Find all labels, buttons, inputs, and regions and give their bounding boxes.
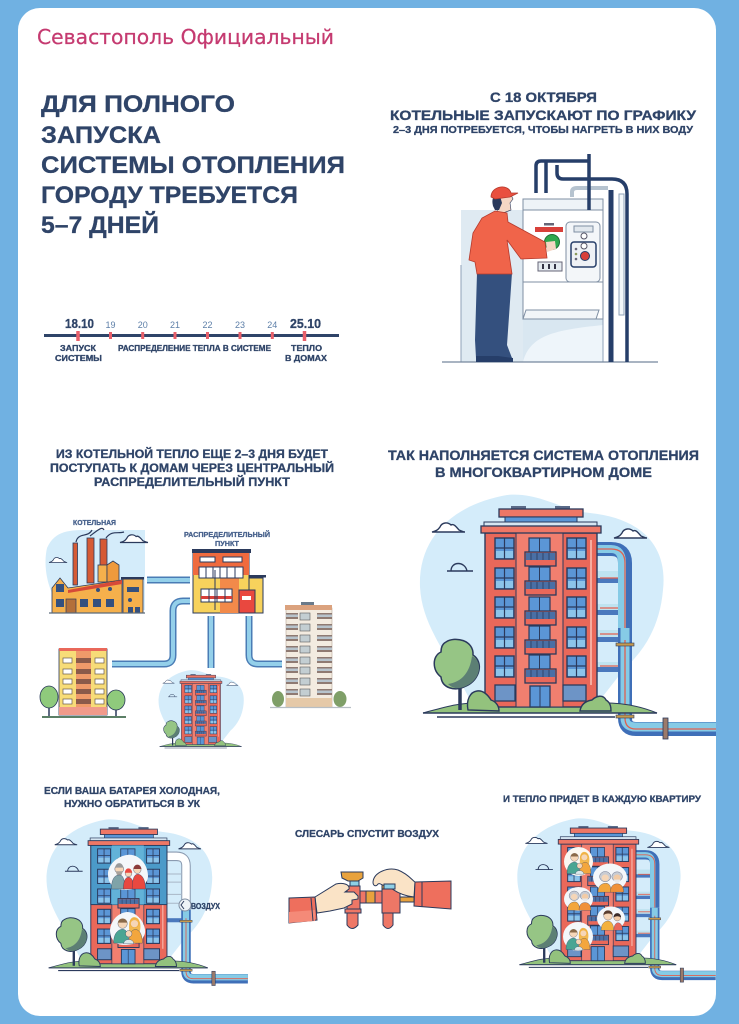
icon: yellow apartment block <box>40 648 126 717</box>
timeline dates: 23 <box>235 320 245 330</box>
timeline dates <box>65 317 321 331</box>
illustration: building filled with heat <box>420 495 716 739</box>
timeline captions: ЗАПУСК <box>60 343 97 353</box>
illustration: worker at boiler <box>442 154 658 362</box>
timeline dates: 19 <box>105 320 116 330</box>
bubble: cold family <box>108 855 148 890</box>
cold radiator heading <box>44 785 220 810</box>
main title: ЗАПУСКА <box>41 122 161 149</box>
label: distribution point: ПУНКТ <box>215 539 239 548</box>
main title: СИСТЕМЫ ОТОПЛЕНИЯ <box>41 152 345 179</box>
boiler heading: С 18 ОКТЯБРЯ <box>490 90 597 105</box>
icon: boiler house <box>46 528 148 613</box>
timeline <box>44 317 339 363</box>
main title: ГОРОДУ ТРЕБУЕТСЯ <box>41 182 298 209</box>
icon: tall apartment block <box>270 602 351 708</box>
boiler heading: КОТЕЛЬНЫЕ ЗАПУСКАЮТ ПО ГРАФИКУ <box>390 108 697 123</box>
illustration: building with warm apartments <box>517 818 716 982</box>
bubble: warm family <box>110 912 145 945</box>
worker <box>469 187 556 362</box>
main title: ДЛЯ ПОЛНОГО <box>41 91 235 118</box>
main title: 5–7 ДНЕЙ <box>41 211 159 239</box>
bubble: family <box>563 922 593 951</box>
icon: distribution point <box>192 549 266 613</box>
icon: red apartment block <box>159 670 244 748</box>
icon: air vent <box>179 899 191 911</box>
label: air: ВОЗДУХ <box>191 902 221 911</box>
timeline dates: 24 <box>267 320 277 330</box>
timeline dates: 21 <box>170 320 180 330</box>
timeline captions: СИСТЕМЫ <box>55 353 102 363</box>
timeline dates: 25.10 <box>290 317 321 331</box>
building heading: В МНОГОКВАРТИРНОМ ДОМЕ <box>435 465 652 480</box>
warm apartments heading: И ТЕПЛО ПРИДЕТ В КАЖДУЮ КВАРТИРУ <box>503 794 701 805</box>
boiler heading <box>390 90 697 136</box>
bubble: family <box>564 847 593 876</box>
timeline dates: 22 <box>202 320 213 330</box>
illustration: hands opening valve <box>289 869 451 928</box>
timeline captions: РАСПРЕДЕЛЕНИЕ ТЕПЛА В СИСТЕМЕ <box>118 343 271 353</box>
label: distribution point: РАСПРЕДЕЛИТЕЛЬНЫЙ <box>184 530 270 539</box>
boiler heading: 2–3 ДНЯ ПОТРЕБУЕТСЯ, ЧТОБЫ НАГРЕТЬ В НИХ ВОДУ <box>393 125 694 136</box>
brand heading: Севастополь Официальный <box>37 25 334 49</box>
distribution heading <box>50 446 334 489</box>
label: boiler house: КОТЕЛЬНАЯ <box>73 518 116 527</box>
main title <box>41 91 345 239</box>
timeline dates: 18.10 <box>65 317 94 331</box>
cold radiator heading: ЕСЛИ ВАША БАТАРЕЯ ХОЛОДНАЯ, <box>44 785 220 797</box>
distribution diagram <box>40 518 351 748</box>
plumber heading: СЛЕСАРЬ СПУСТИТ ВОЗДУХ <box>295 828 439 840</box>
bubble: elderly couple <box>593 864 627 892</box>
boiler cabinet <box>523 199 603 319</box>
heating pipes <box>536 154 627 362</box>
building heading <box>388 448 699 480</box>
distribution heading: РАСПРЕДЕЛИТЕЛЬНЫЙ ПУНКТ <box>94 474 291 489</box>
bubble: young couple <box>597 906 625 930</box>
right hand <box>373 869 451 909</box>
label: distribution point <box>184 530 270 548</box>
timeline captions <box>55 343 327 363</box>
distribution heading: ПОСТУПАТЬ К ДОМАМ ЧЕРЕЗ ЦЕНТРАЛЬНЫЙ <box>50 460 334 475</box>
bubble: elderly couple <box>564 887 593 911</box>
timeline captions: В ДОМАХ <box>285 353 327 363</box>
cold radiator heading: НУЖНО ОБРАТИТЬСЯ В УК <box>64 798 201 810</box>
left hand <box>289 883 358 923</box>
distribution heading: ИЗ КОТЕЛЬНОЙ ТЕПЛО ЕЩЕ 2–3 ДНЯ БУДЕТ <box>56 446 329 461</box>
pipes between buildings <box>112 580 282 668</box>
timeline captions: ТЕПЛО <box>291 343 322 353</box>
building heading: ТАК НАПОЛНЯЕТСЯ СИСТЕМА ОТОПЛЕНИЯ <box>388 448 699 463</box>
valve <box>341 872 414 928</box>
illustration: building with cold top floors <box>47 819 248 986</box>
timeline dates: 20 <box>138 320 148 330</box>
